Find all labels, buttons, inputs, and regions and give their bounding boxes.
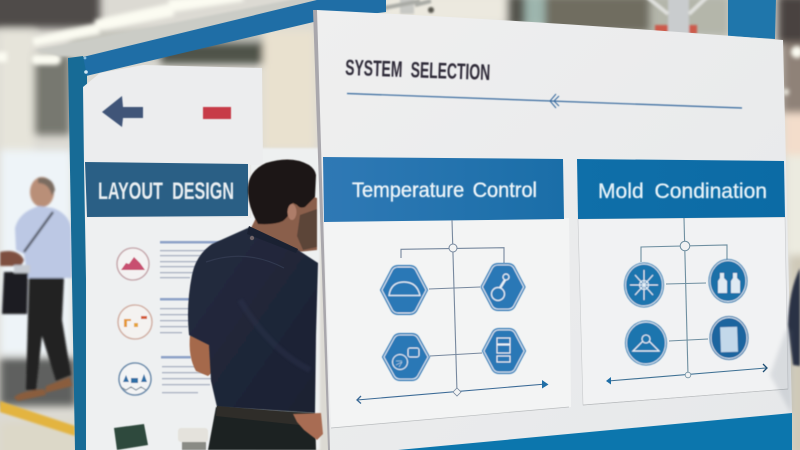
header: mold condination <box>577 159 785 219</box>
header: mold condination: Mold Condination <box>598 180 767 203</box>
right arrow head <box>542 380 548 388</box>
header: temperature control: Temperature Control <box>352 179 537 202</box>
collar <box>247 226 298 253</box>
shadow on board <box>770 330 792 415</box>
dark polo shirt <box>188 226 318 413</box>
heading: layout design: LAYOUT DESIGN <box>98 178 234 205</box>
items on the ledge <box>114 424 208 450</box>
node <box>449 244 457 252</box>
head <box>248 159 317 252</box>
diamond node <box>453 388 461 396</box>
board face <box>317 10 792 450</box>
truss and clamps <box>384 0 708 34</box>
blue booth frame <box>68 0 386 450</box>
header: temperature control <box>323 157 564 222</box>
red marker <box>203 107 231 119</box>
panel: mold condination <box>577 159 788 405</box>
icon: probe <box>482 264 524 310</box>
flow diagram lines <box>641 218 727 375</box>
board side edge <box>313 10 332 450</box>
icon: triangle and circle <box>625 320 667 366</box>
node <box>680 241 690 251</box>
beard <box>297 209 317 250</box>
icon: pink terrain circle <box>117 248 149 280</box>
bottom arrow axis <box>608 368 766 381</box>
person viewing the board <box>188 159 323 450</box>
sign top panel <box>83 65 263 450</box>
heading: layout design <box>85 162 248 217</box>
icon: left arrow <box>102 96 143 127</box>
arm <box>190 335 214 376</box>
blue rear post <box>728 0 776 39</box>
icon: gauge and block <box>383 334 429 380</box>
ear <box>288 204 296 220</box>
bottom blue band <box>398 413 792 450</box>
heading: system selection: SYSTEM SELECTION <box>345 55 491 85</box>
text block: blurred descriptions <box>160 241 221 393</box>
flow diagram lines <box>401 220 504 392</box>
right arrow head <box>763 364 767 372</box>
divider arrow <box>347 94 742 108</box>
icon: dome <box>381 266 427 314</box>
ceiling lights are decorative highlights <box>0 0 800 95</box>
blurred visitor on the left <box>0 177 72 401</box>
belt and trousers <box>208 407 316 450</box>
second visitor at right edge <box>788 268 800 366</box>
icon: orange blocks circle <box>118 305 152 339</box>
yellow floor stripe <box>0 401 75 436</box>
icon: blue landscape circle <box>119 363 151 395</box>
panel: temperature control <box>323 157 571 428</box>
icon: stacked cells <box>483 329 525 373</box>
round node <box>685 372 691 378</box>
left arrow head <box>606 377 611 384</box>
icon: document <box>710 316 748 360</box>
white wall behind person <box>250 148 320 450</box>
hair <box>248 159 316 224</box>
neck and face <box>250 192 317 252</box>
icon: radial burst <box>624 262 664 308</box>
button <box>250 236 254 240</box>
bottom arrow axis <box>357 384 546 404</box>
hand <box>293 413 323 440</box>
main board: system selection <box>313 10 792 450</box>
panel: layout design sign <box>83 65 263 450</box>
lower board rule <box>331 389 788 428</box>
icon: two bottles <box>708 259 748 303</box>
